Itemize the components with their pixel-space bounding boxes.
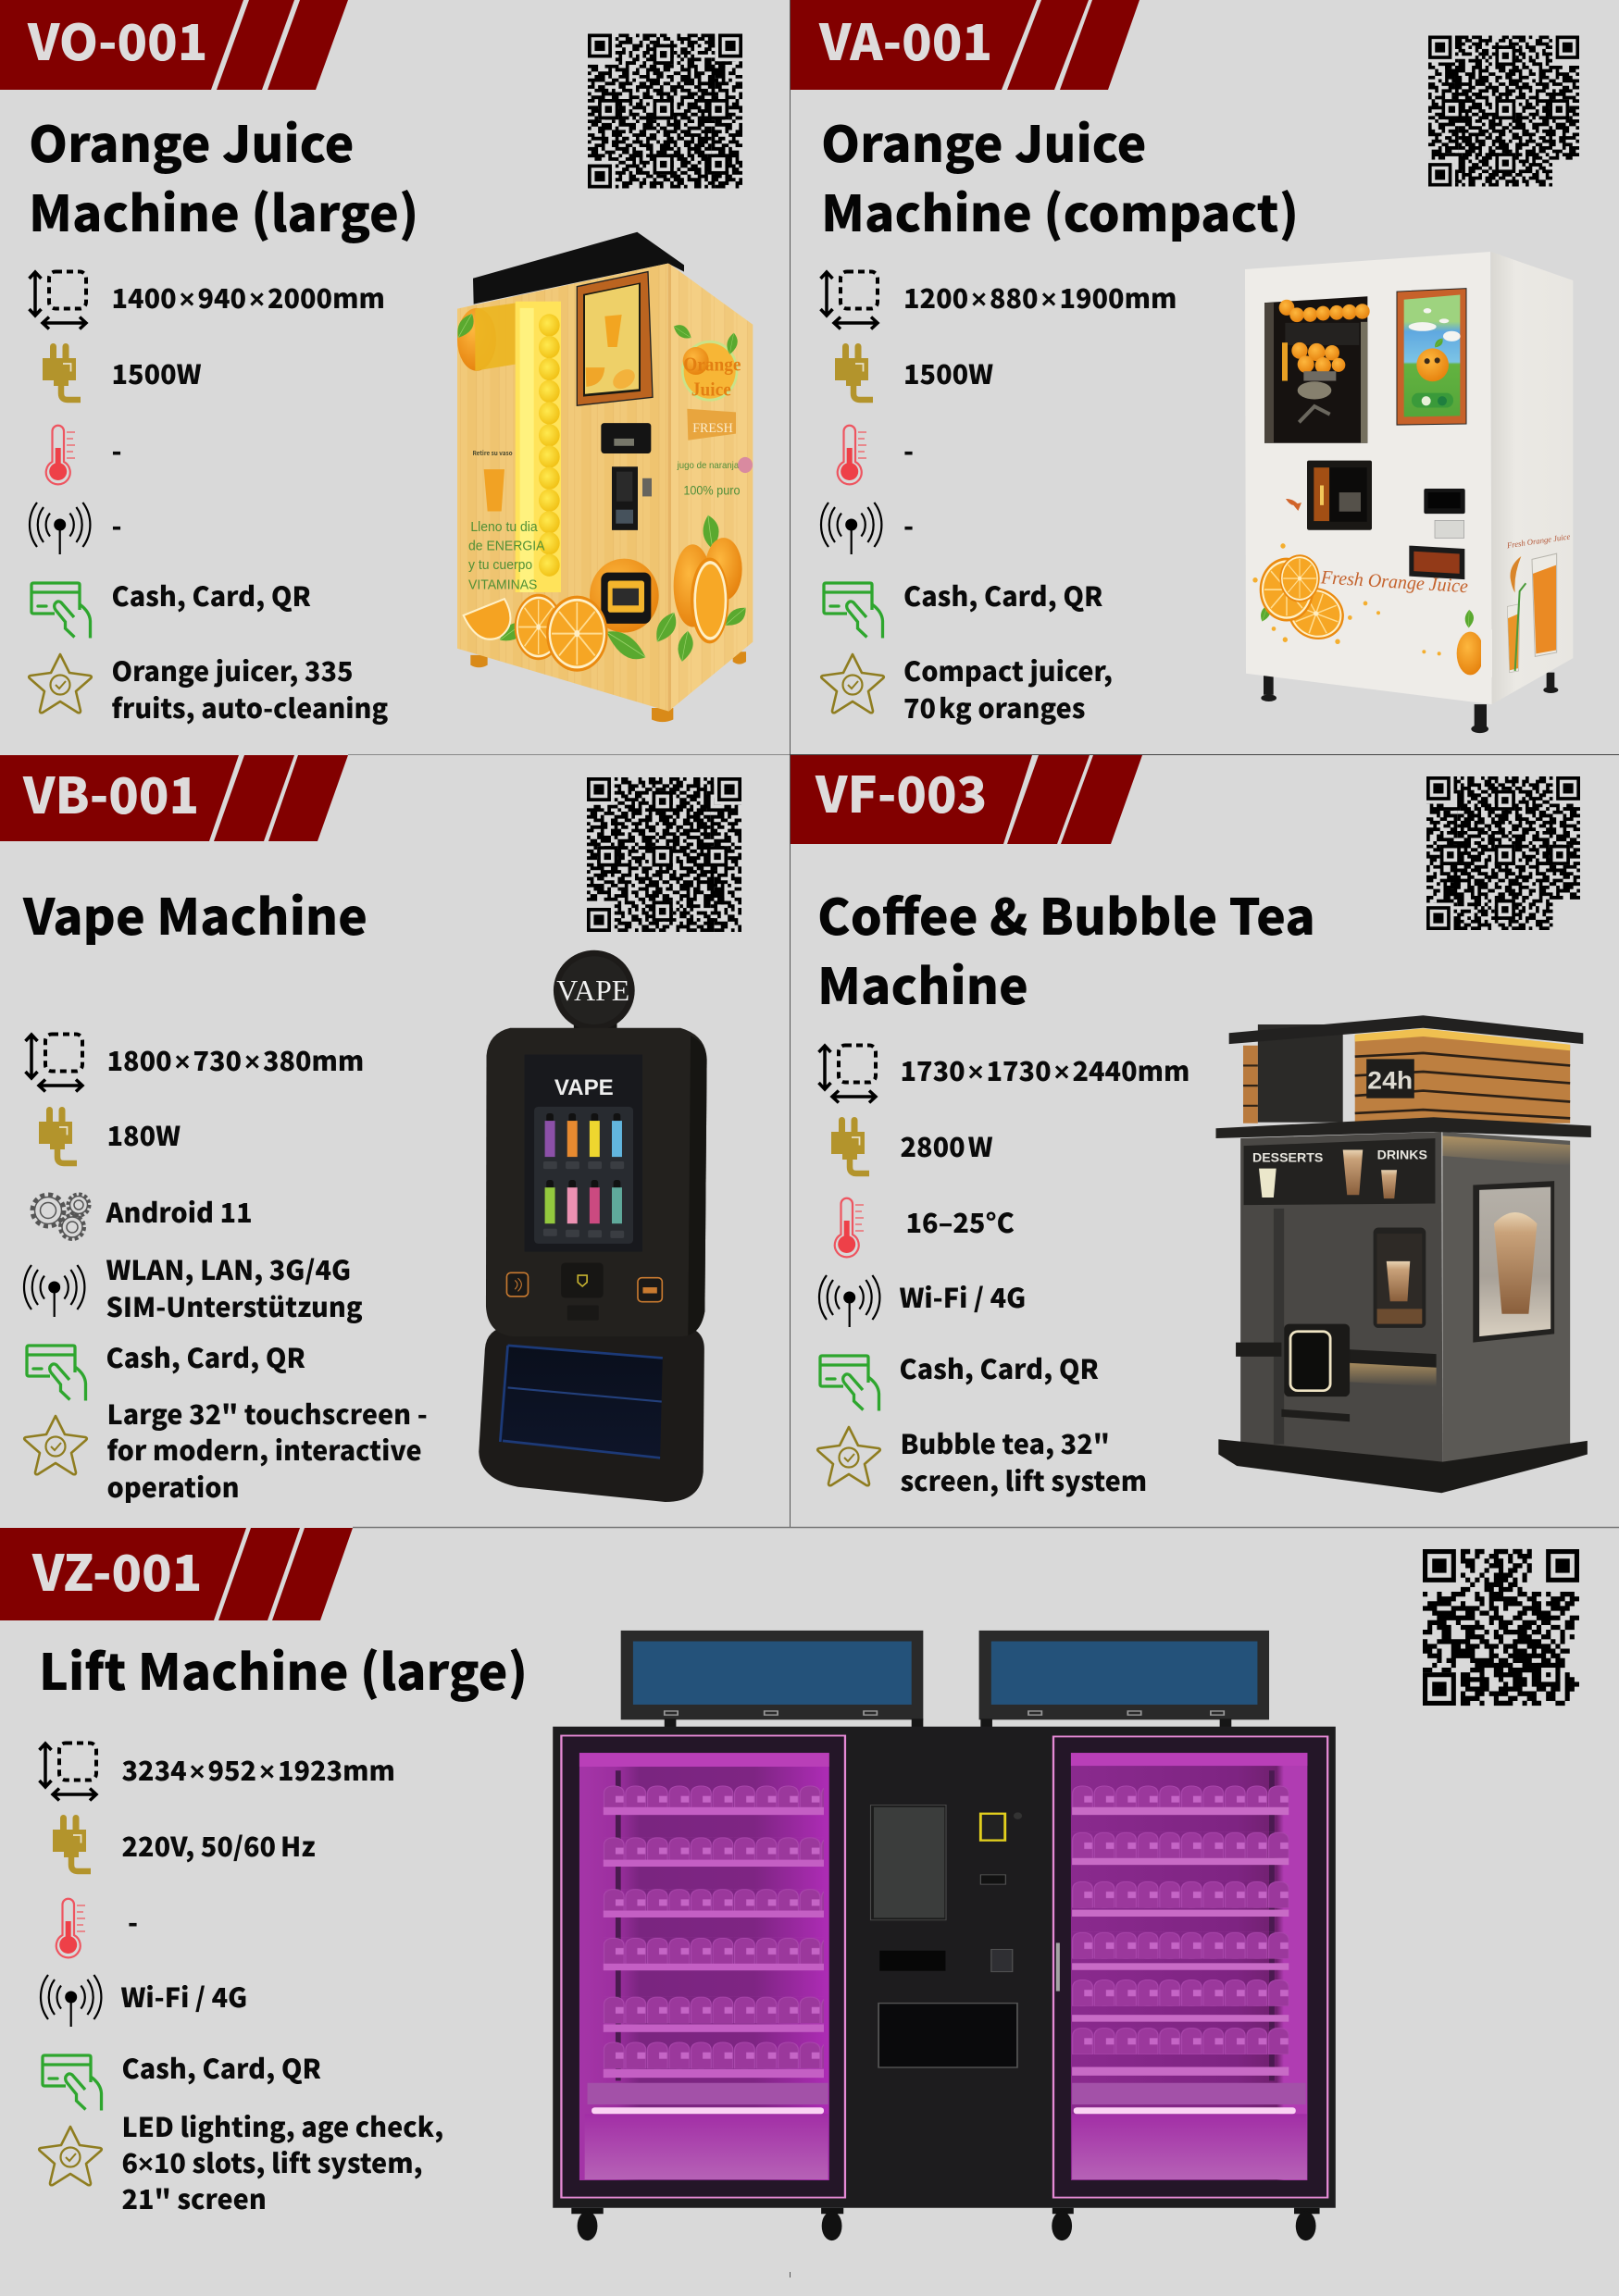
QR code	[1423, 1552, 1579, 1703]
spec: temperature: -	[903, 431, 914, 469]
spec: power: 180W	[107, 1116, 181, 1154]
spec: power: 2800W	[900, 1127, 993, 1165]
icon: card payment	[820, 1356, 879, 1410]
image text: menu desserts: DESSERTS	[1252, 1150, 1323, 1164]
spec: power: 220V, 50/60Hz	[122, 1827, 316, 1865]
panel: VZ-001	[0, 1528, 1619, 2296]
spec: payment: Cash, Card, QR	[903, 577, 1102, 614]
spec: features: LED lighting, age check,	[122, 2107, 443, 2145]
icon: card payment	[824, 583, 883, 639]
icon: power plug	[43, 343, 81, 400]
title: Machine	[817, 948, 1028, 1019]
image text: menu drinks: DRINKS	[1377, 1148, 1427, 1161]
spec: features: kg oranges	[939, 689, 1085, 726]
icon: card payment	[31, 583, 91, 639]
icon: dimensions	[818, 1046, 876, 1103]
image text: logo: Juice	[691, 379, 731, 401]
image text: slogan: Lleno tu dia	[470, 520, 539, 535]
panel: VB-001	[0, 755, 824, 1527]
icon: thermometer	[838, 426, 866, 484]
spec: connectivity: -	[903, 506, 914, 544]
spec: connectivity: WLAN, LAN, 3G/4G	[106, 1250, 351, 1288]
icon: wireless	[30, 503, 90, 554]
icon: wireless	[819, 1275, 879, 1327]
spec: features: 70	[903, 689, 936, 726]
QR code	[1344, 776, 1580, 930]
spec: dimensions: 1400×940×2000mm	[111, 279, 385, 316]
icon: wireless	[821, 503, 881, 554]
icon: dimensions	[39, 1744, 96, 1801]
title: Machine (compact)	[821, 175, 1299, 246]
spec: features: 21" screen	[122, 2179, 267, 2217]
spec: operating system: Android 11	[106, 1193, 253, 1231]
icon: dimensions	[820, 272, 878, 329]
machine: vape vending machine	[479, 950, 707, 1502]
spec: dimensions: 1800×730×380mm	[107, 1041, 364, 1079]
machine: compact orange juice vending machine	[1245, 252, 1573, 733]
icon: gears	[32, 1194, 89, 1239]
ribbon: VA-001	[790, 0, 1140, 90]
icon: dimensions	[26, 1035, 82, 1092]
spec: payment: Cash, Card, QR	[106, 1338, 305, 1376]
image text: 24h sign: 24h	[1367, 1066, 1413, 1094]
title: Vape Machine	[22, 878, 367, 949]
QR code	[588, 33, 825, 189]
shelves: right door	[1072, 1786, 1289, 2076]
ribbon: VF-003	[790, 755, 1142, 844]
title: Orange Juice	[29, 105, 355, 177]
icon: power plug	[831, 1117, 869, 1173]
panel: VF-003	[790, 755, 1619, 1527]
spec: connectivity: -	[111, 506, 122, 544]
icon: card payment	[43, 2055, 102, 2110]
spec: temperature: 16–25°C	[905, 1203, 1015, 1241]
spec: connectivity: SIM-Unterstützung	[106, 1287, 363, 1325]
title: Machine (large)	[29, 175, 418, 246]
image text: front slogan: Fresh Orange Juice	[1319, 567, 1469, 597]
spec: dimensions: 3234×952×1923mm	[122, 1751, 395, 1789]
ribbon: VO-001: VO-001	[27, 4, 207, 75]
ribbon: VA-001: VA-001	[818, 4, 992, 75]
image text: logo: Orange	[683, 354, 741, 376]
icon: thermometer	[46, 426, 75, 484]
spec: features: for modern, interactive	[107, 1431, 422, 1469]
spec: features: Large 32" touchscreen -	[107, 1395, 428, 1433]
image text: screen heading: VAPE	[554, 1075, 614, 1100]
image text: spanish claim: jugo de naranja	[677, 461, 740, 471]
image text: slogan: VITAMINAS	[468, 577, 537, 593]
spec: features: Compact juicer,	[903, 652, 1113, 689]
machine: coffee and bubble tea kiosk	[1216, 1015, 1591, 1493]
icon: star	[29, 654, 92, 713]
title: Lift Machine (large)	[39, 1633, 528, 1705]
spec: features: operation	[107, 1468, 240, 1506]
image text: slogan: de ENERGIA	[468, 539, 545, 553]
icon: thermometer	[835, 1198, 864, 1257]
icon: power plug	[39, 1107, 77, 1163]
spec: temperature: -	[128, 1903, 138, 1941]
spec: dimensions: 1200×880×1900mm	[903, 279, 1177, 316]
panel: VA-001	[790, 0, 1619, 754]
spec: temperature: -	[111, 431, 122, 469]
machine: large orange juice vending machine	[452, 232, 753, 722]
QR code	[1348, 35, 1579, 187]
icon: star	[817, 1427, 880, 1485]
shelves: left door	[604, 1786, 824, 2078]
icon: wireless	[24, 1265, 84, 1317]
spec: payment: Cash, Card, QR	[900, 1349, 1099, 1387]
title: Orange Juice	[821, 105, 1147, 177]
title: Coffee & Bubble Tea	[817, 878, 1315, 949]
icon: star	[24, 1416, 87, 1474]
image text: side slogan: Fresh Orange Juice	[1505, 531, 1571, 551]
icon: dimensions	[30, 272, 86, 329]
ribbon: VB-001	[0, 755, 348, 841]
icon: power plug	[53, 1815, 91, 1871]
spec: payment: Cash, Card, QR	[122, 2049, 321, 2087]
image text: spanish claim: 100% puro	[683, 483, 741, 498]
panel divider lines	[348, 0, 1619, 2277]
spec: features: Orange juicer, 335	[111, 652, 354, 689]
image text: cup prompt: Retire su vaso	[472, 448, 513, 457]
machine: large lift vending machine	[553, 1631, 1336, 2240]
icon: card payment	[27, 1346, 85, 1401]
spec: power: 1500W	[111, 354, 202, 392]
icon: thermometer	[56, 1899, 85, 1957]
spec: dimensions: 1730×1730×2440mm	[900, 1051, 1189, 1089]
image text: fresh: FRESH	[692, 420, 733, 436]
spec: features: 6×10 slots, lift system,	[122, 2143, 423, 2181]
image text: round sign: VAPE	[556, 974, 629, 1007]
icon: star	[39, 2127, 102, 2185]
spec: connectivity: Wi-Fi / 4G	[120, 1978, 247, 2016]
ribbon: VZ-001: VZ-001	[31, 1534, 202, 1606]
QR code	[587, 777, 824, 932]
ribbon: VF-003: VF-003	[815, 756, 987, 827]
spec: features: Bubble tea, 32"	[900, 1424, 1110, 1462]
ribbon: VO-001	[0, 0, 348, 90]
spec: payment: Cash, Card, QR	[111, 577, 311, 614]
spec: power: 1500W	[903, 354, 993, 392]
panel: VO-001	[0, 0, 825, 754]
ribbon: VB-001: VB-001	[22, 757, 199, 828]
icon: power plug	[835, 343, 873, 400]
image text: slogan: y tu cuerpo	[468, 558, 532, 573]
icon: wireless	[41, 1975, 101, 2027]
icon: star	[821, 654, 884, 713]
ribbon: VZ-001	[0, 1528, 353, 1620]
spec: connectivity: Wi-Fi / 4G	[900, 1278, 1026, 1316]
spec: features: fruits, auto-cleaning	[111, 689, 389, 726]
spec: features: screen, lift system	[900, 1461, 1147, 1499]
